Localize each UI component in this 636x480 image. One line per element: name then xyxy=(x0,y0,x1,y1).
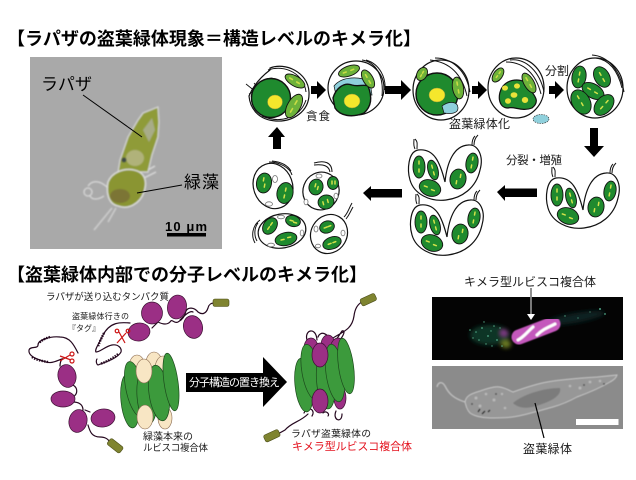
arrow: molecular replacement: 分子構造の置き換え xyxy=(189,375,280,389)
label: green alga native complex: 緑藻本来の xyxy=(143,430,193,443)
panel: brightfield micrograph xyxy=(432,366,623,429)
protein chain: lower left xyxy=(29,337,124,454)
arrow: white pointer xyxy=(527,288,535,320)
leader line: Rapaza xyxy=(83,95,142,137)
scale bar xyxy=(576,419,618,425)
label: protein sent by Rapaza: ラパザが送り込むタンパク質 xyxy=(46,291,169,303)
label: chloroplast transit tag: 盗葉緑体行きの xyxy=(72,311,129,321)
label: kleptoplast: 盗葉緑体 xyxy=(523,441,572,456)
panel: fluorescence micrograph xyxy=(432,288,623,360)
label: tag: 『タグ』 xyxy=(68,323,100,333)
chimeric RuBisCO complex xyxy=(263,293,377,443)
title: lower section heading: 【盗葉緑体内部での分子レベルのキメラ化】 xyxy=(7,265,367,285)
arrow: black pointer to kleptoplast xyxy=(535,403,544,438)
cell 2 xyxy=(328,60,385,116)
cell 4 xyxy=(488,58,549,124)
label: phagocytosis: 貪食 xyxy=(306,110,330,123)
label: chimeric RuBisCO complex (red): キメラ型ルビスコ複合体 xyxy=(292,439,412,453)
cell 3 xyxy=(413,58,470,120)
diagram: molecular-level replacement xyxy=(29,291,412,454)
four separated cells xyxy=(247,158,355,260)
label: Rapaza kleptoplast: ラパザ盗葉緑体の xyxy=(291,427,371,440)
arrow: left xyxy=(363,186,402,201)
cell 1: engulfing xyxy=(246,66,309,121)
dividing cells: lower pair xyxy=(411,190,483,255)
label: kleptoplastidy: 盗葉緑体化 xyxy=(449,116,510,131)
dividing cells: upper pair xyxy=(409,135,481,200)
separated cell C xyxy=(253,210,309,252)
arrow xyxy=(385,80,411,100)
scissors: upper chain xyxy=(115,329,130,343)
scale bar label: 10 μm xyxy=(165,219,207,234)
arrow: down xyxy=(584,128,604,157)
arrow xyxy=(472,81,487,99)
label: chimeric complex above micrographs: キメラ型ルビスコ複合体 xyxy=(464,275,596,289)
arrow xyxy=(311,81,326,99)
dividing cells: right pair xyxy=(547,163,619,228)
label: Rapaza: ラパザ xyxy=(41,75,92,94)
arrow: left xyxy=(497,185,537,201)
separated cell A xyxy=(247,158,299,214)
separated cell D xyxy=(303,203,355,260)
separated cell B xyxy=(298,162,344,215)
arrow: molecular replacement xyxy=(186,357,287,407)
leader line: green alga xyxy=(137,185,182,193)
scissors: lower chain xyxy=(60,352,74,363)
label: fission and proliferation: 分裂・増殖 xyxy=(506,154,562,167)
arrow xyxy=(549,81,564,99)
label: division: 分割 xyxy=(545,64,569,78)
label: RuBisCO complex: ルビスコ複合体 xyxy=(143,442,208,454)
diagram: chloroplast theft life cycle xyxy=(246,55,624,260)
arrow: up xyxy=(268,127,285,149)
label: green alga: 緑藻 xyxy=(184,173,219,192)
title: top section heading: 【ラパザの盗葉緑体現象＝構造レベルのキメラ化】 xyxy=(7,29,421,49)
panel: microscope photo of Rapaza xyxy=(30,57,222,249)
scale bar xyxy=(167,233,206,236)
protein chain: upper right xyxy=(96,294,229,365)
cell 5 xyxy=(567,55,624,119)
green alga native RuBisCO complex xyxy=(118,352,182,429)
